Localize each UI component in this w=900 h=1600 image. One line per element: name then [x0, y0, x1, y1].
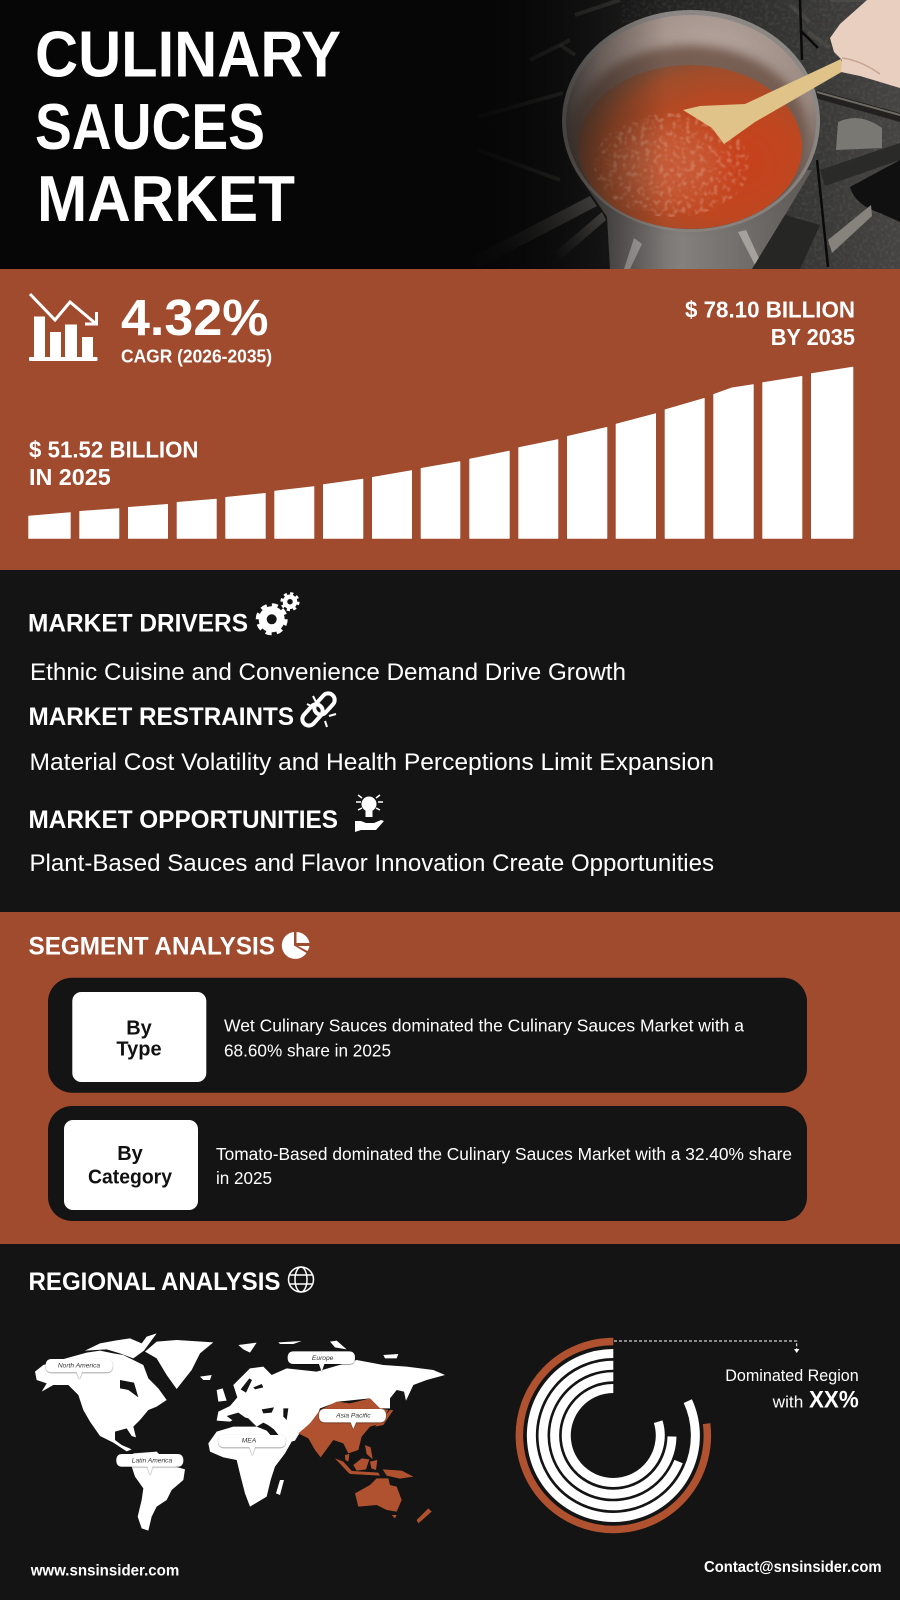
label box: by type: Type — [116, 1039, 162, 1061]
bar chart: market growth — [29, 367, 853, 538]
heading: market restraints: MARKET RESTRAINTS — [28, 703, 294, 731]
2025 value label — [29, 437, 198, 490]
title: SAUCES — [35, 90, 265, 163]
text: drivers: Ethnic Cuisine and Convenience Demand Drive Growth — [30, 659, 626, 686]
title: CULINARY — [35, 18, 341, 91]
world map — [35, 1333, 445, 1531]
2025 value label: IN 2025 — [29, 464, 111, 490]
text: by category: in 2025 — [216, 1168, 272, 1188]
heading: regional analysis: REGIONAL ANALYSIS — [28, 1268, 280, 1296]
burner grate right — [815, 90, 900, 122]
title: MARKET — [37, 162, 295, 235]
text: by category: Tomato-Based dominated the Culinary Sauces Market with a 32.40% share — [216, 1144, 792, 1164]
callout: MEA — [218, 1435, 286, 1455]
callout: Asia Pacific — [319, 1409, 386, 1429]
2035 value label: $ 78.10 BILLION — [685, 297, 855, 323]
callout: Asia Pacific: Asia Pacific — [335, 1412, 371, 1419]
footer: website: www.snsinsider.com — [30, 1563, 179, 1580]
label box: by type — [72, 992, 206, 1082]
callout: Europe: Europe — [312, 1355, 334, 1362]
label box: by category — [64, 1120, 198, 1210]
title — [35, 18, 341, 235]
text: restraints: Material Cost Volatility and Health Perceptions Limit Expansion — [30, 749, 714, 776]
pot body — [575, 170, 812, 269]
text: by type: Wet Culinary Sauces dominated the Culinary Sauces Market with a — [224, 1016, 744, 1036]
icon: globe — [288, 1267, 314, 1292]
fade to black — [470, 0, 658, 269]
2025 value label: $ 51.52 BILLION — [29, 437, 198, 463]
callout: Europe — [288, 1351, 355, 1372]
2035 value label — [685, 297, 855, 350]
panel: regional analysis — [0, 1244, 900, 1600]
callout: North America: North America — [58, 1363, 100, 1370]
panel: segment analysis — [0, 912, 900, 1244]
pot handles — [516, 196, 597, 244]
text: by type: 68.60% share in 2025 — [224, 1041, 391, 1061]
arrow: dashed leader — [614, 1341, 799, 1353]
panel: market drivers, restraints, opportunities — [0, 570, 900, 912]
text: opportunities: Plant-Based Sauces and Flavor Innovation Create Opportunities — [30, 850, 714, 877]
footer: contact: Contact@snsinsider.com — [704, 1559, 882, 1576]
2035 value label: BY 2035 — [771, 324, 855, 350]
pot rim — [562, 10, 820, 232]
card: by category — [48, 1106, 807, 1221]
CAGR label: CAGR (2026-2035) — [121, 347, 272, 367]
icon: gears — [258, 593, 298, 633]
callout: dominated region — [725, 1367, 859, 1413]
label box: by type: By — [126, 1017, 153, 1039]
heading: segment analysis: SEGMENT ANALYSIS — [28, 932, 275, 960]
callout: Latin America: Latin America — [132, 1457, 173, 1464]
hand — [830, 0, 900, 88]
heading: market opportunities: MARKET OPPORTUNITIES — [28, 806, 338, 834]
callout: Latin America — [116, 1454, 183, 1475]
text: by type — [224, 1016, 744, 1061]
callout: MEA: MEA — [242, 1438, 257, 1445]
heading: market drivers: MARKET DRIVERS — [28, 610, 248, 638]
spoon — [683, 59, 845, 144]
icon: broken chain — [300, 691, 337, 728]
callout: dominated region: XX% — [809, 1386, 859, 1413]
radial bar chart — [519, 1342, 707, 1529]
icon: falling chart — [29, 294, 98, 361]
photo: sauce pot on stove — [510, 0, 900, 269]
icon: idea in hand — [355, 795, 384, 832]
callout: North America — [46, 1359, 113, 1379]
text: by category — [216, 1144, 792, 1188]
icon: pie chart — [282, 932, 310, 959]
CAGR value: 4.32% — [121, 289, 268, 346]
label box: by category: By — [117, 1143, 144, 1165]
callout: dominated region: with — [772, 1393, 803, 1411]
callout: dominated region: Dominated Region — [725, 1367, 859, 1385]
sauce — [578, 65, 802, 229]
panel: market size growth — [0, 269, 900, 570]
label box: by category: Category — [88, 1166, 173, 1188]
card: by type — [48, 978, 807, 1093]
panel: header — [0, 0, 900, 269]
